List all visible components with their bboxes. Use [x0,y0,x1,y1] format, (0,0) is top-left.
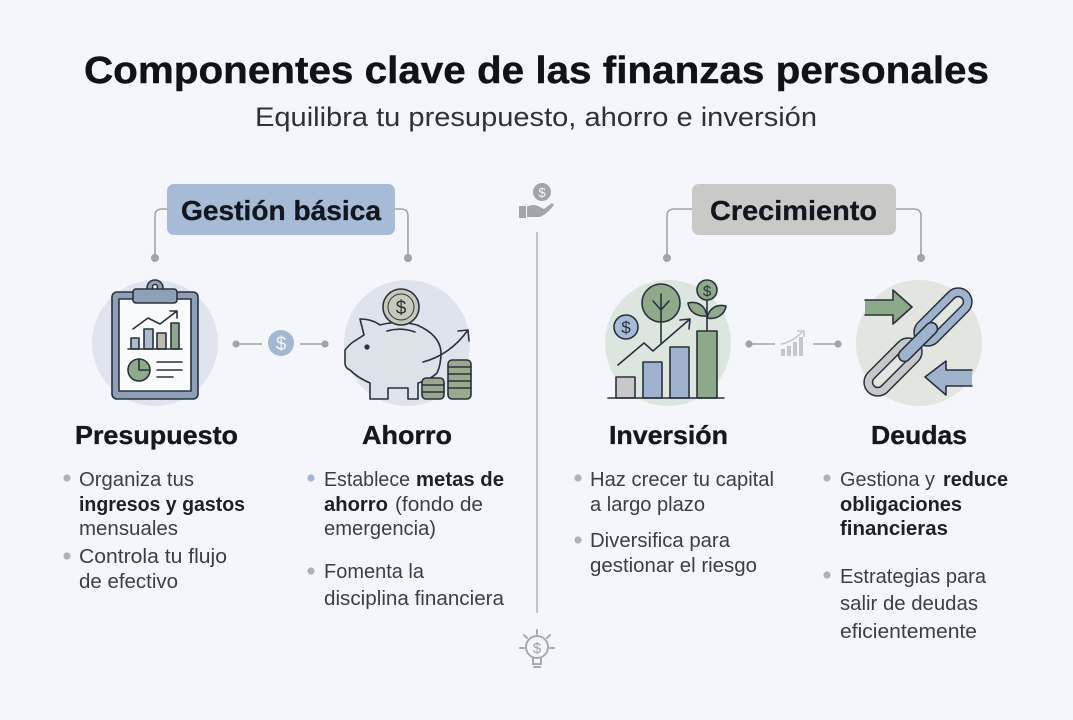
heading: Presupuesto: Presupuesto [75,420,238,450]
bullet: flujo de efectivo: de efectivo [79,570,178,593]
heading: Gestión básica [167,184,395,235]
bullet: disciplina financiera: disciplina financiera [324,587,505,610]
connector with mini chart [745,331,842,356]
bullet: ingresos y gastos [63,468,245,540]
heading: Gestión básica: Gestión básica [181,195,381,226]
bullet: diversifica: gestionar el riesgo [590,554,757,577]
bullet: estrategias: salir de deudas [840,592,978,615]
icon: investment growth: $ [621,318,631,337]
icon: hand holding coin [519,183,554,218]
icon: investment growth [605,280,731,406]
bullet: estrategias: eficientemente [840,620,977,643]
icon: chain links [856,280,982,406]
icon: clipboard budget [92,280,218,406]
bullet: ingresos y gastos: Organiza tus [79,468,194,491]
bullet: metas de ahorro: emergencia) [324,517,436,540]
icon: lightbulb with coin: $ [533,640,542,657]
bullet: disciplina financiera: Fomenta la [324,560,425,583]
bullet: diversifica [574,529,757,577]
column: Ahorro [307,420,505,610]
icon: piggy bank: $ [396,298,407,319]
bullet: reduce obligaciones [823,468,1008,540]
connector brackets [663,209,925,262]
bullet: reduce obligaciones: Gestiona y [840,468,936,491]
central divider [519,183,554,667]
bullet: flujo de efectivo: Controla tu flujo [79,545,227,568]
column: Inversión [574,420,774,577]
bullet: ingresos y gastos: mensuales [79,517,178,540]
title: Componentes clave de las finanzas personales [84,50,989,92]
bullet: capital a largo plazo: a largo plazo [590,493,705,516]
heading: Inversión: Inversión [609,420,728,450]
heading: Ahorro: Ahorro [362,420,452,450]
bullet: disciplina financiera [307,560,505,610]
icon: piggy bank [344,280,471,406]
icon: lightbulb with coin [520,630,554,667]
panel: Crecimiento [574,184,1008,643]
bullet: estrategias: Estrategias para [840,565,987,588]
column: Presupuesto [63,420,245,593]
bullet: metas de ahorro: (fondo de [395,493,483,516]
bullet: reduce obligaciones: reduce [943,468,1008,491]
bullet: flujo de efectivo [63,545,227,593]
bullet: reduce obligaciones: financieras [840,517,948,540]
icon: investment growth: $ [703,283,712,300]
connector with dollar coin: $ [276,334,287,355]
panel: Gestión básica [63,184,505,610]
connector brackets [151,209,412,262]
bullet: metas de ahorro: Establece [324,468,410,491]
bullet: estrategias [823,565,987,643]
icon: hand holding coin: $ [538,185,546,200]
bullet: metas de ahorro: metas de [416,468,504,491]
heading: Deudas: Deudas [871,420,967,450]
heading: Crecimiento [692,184,896,235]
connector with dollar coin [232,330,329,356]
bullet: reduce obligaciones: obligaciones [840,493,962,516]
bullet: ingresos y gastos: ingresos y gastos [79,493,245,516]
subtitle: Equilibra tu presupuesto, ahorro e inversión [255,102,817,132]
bullet: metas de ahorro [307,468,504,540]
bullet: diversifica: Diversifica para [590,529,731,552]
bullet: metas de ahorro: ahorro [324,493,388,516]
heading: Crecimiento: Crecimiento [710,195,877,226]
bullet: capital a largo plazo: Haz crecer tu capital [590,468,774,491]
column: Deudas [823,420,1008,643]
bullet: capital a largo plazo [574,468,774,516]
